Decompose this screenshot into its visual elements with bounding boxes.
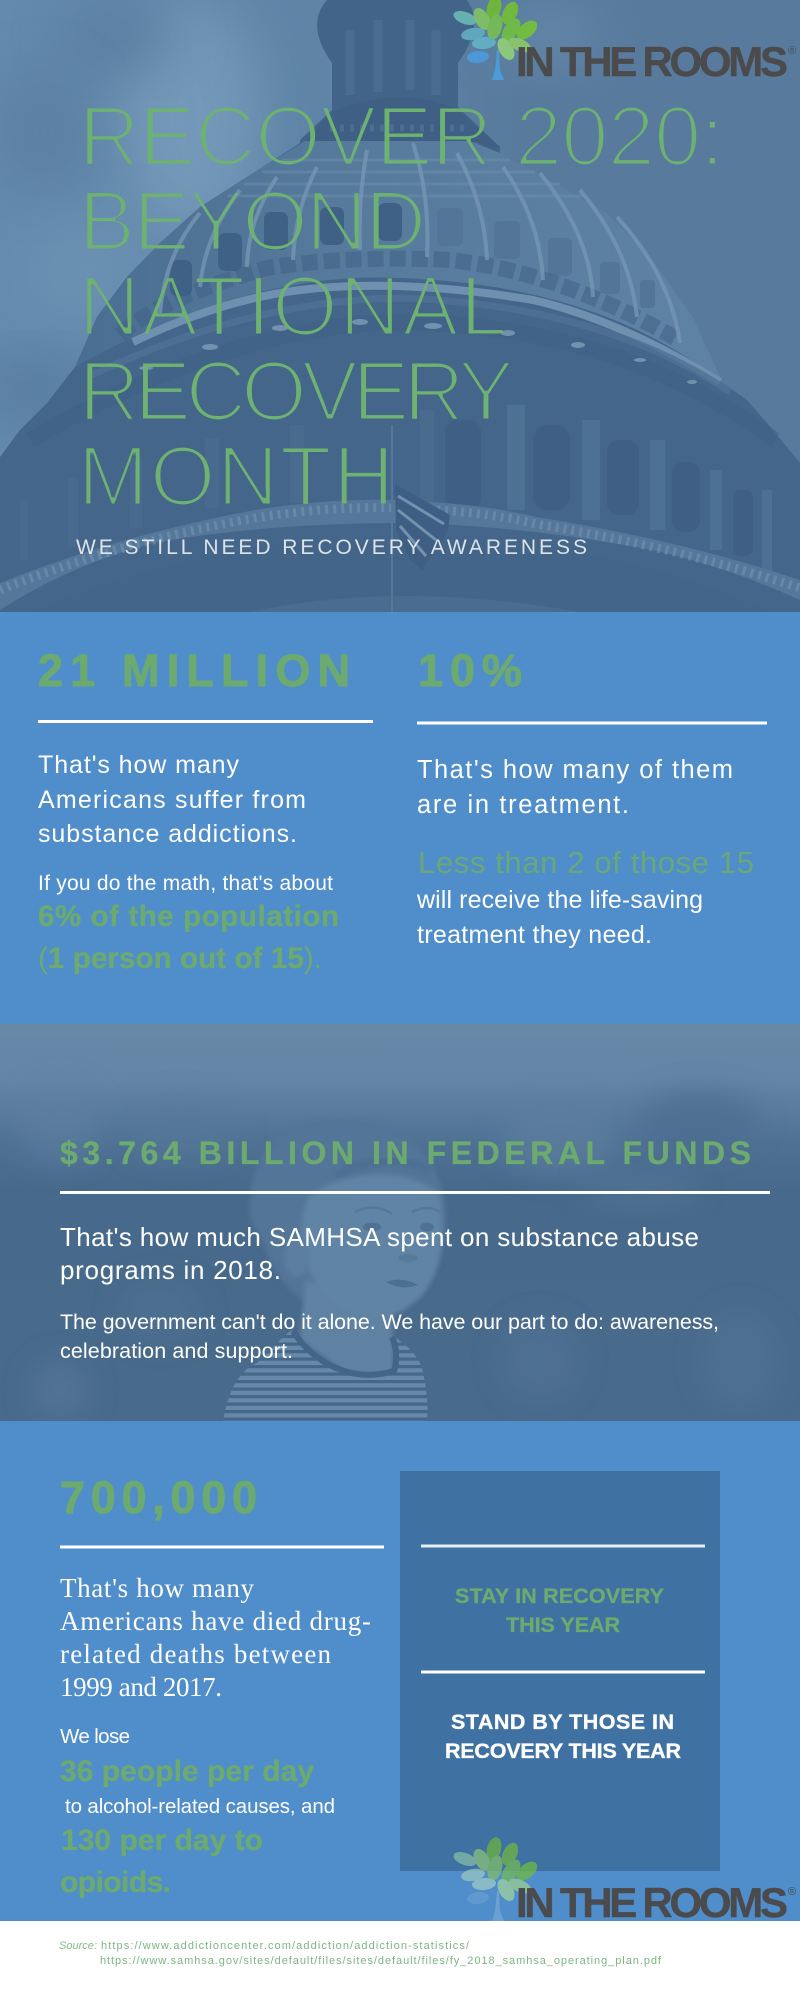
column: 700,000: 700,000 xyxy=(60,1472,257,1523)
balustrade xyxy=(0,500,800,610)
photo: capitol dome background xyxy=(0,0,800,612)
column: 21 million: That's how many xyxy=(38,751,240,779)
panel: source footer xyxy=(0,1921,800,2000)
column: 700,000: to alcohol-related causes, and xyxy=(65,1795,335,1818)
panel: federal funds with child photo xyxy=(0,1024,800,1421)
column: 10 percent: treatment they need. xyxy=(417,921,652,949)
column: 21 million: Americans suffer from xyxy=(38,786,306,814)
column: 21 million: substance addictions. xyxy=(38,820,297,848)
panel: source footer: https://www.addictioncenter.com/addiction/addiction-statistics/ xyxy=(101,1940,470,1952)
title: BEYOND xyxy=(79,174,426,268)
column: 700,000: 1999 and 2017. xyxy=(60,1672,222,1702)
column: 700,000: Americans have died drug- xyxy=(60,1606,371,1636)
column: 10 percent: will receive the life-saving xyxy=(416,886,703,914)
text block: The government can't do it alone. We have our part to do: awareness, xyxy=(60,1310,719,1334)
heading: $3.764 BILLION IN FEDERAL FUNDS xyxy=(60,1135,751,1171)
title: MONTH xyxy=(78,429,394,523)
column: 10 percent: Less than 2 of those 15 xyxy=(418,845,754,880)
column: 700,000: opioids. xyxy=(60,1866,171,1899)
column: 10 percent xyxy=(416,645,767,949)
cornice band xyxy=(133,286,720,382)
logo: In The Rooms (bottom): IN THE ROOMS xyxy=(516,1879,788,1926)
panel: addiction statistics xyxy=(0,612,800,1024)
column: 21 million: 6% of the population xyxy=(38,900,339,933)
flag xyxy=(391,425,393,612)
photo: child xyxy=(0,1024,800,1421)
column: 700,000 xyxy=(60,1472,384,1899)
neck xyxy=(300,1280,394,1375)
text block xyxy=(60,1222,719,1363)
column: 700,000: 130 per day to xyxy=(61,1824,263,1857)
logo: In The Rooms (bottom) xyxy=(452,1836,796,1926)
title: RECOVER 2020: xyxy=(79,89,724,183)
subtitle: WE STILL NEED RECOVERY AWARENESS xyxy=(76,536,587,559)
title: RECOVERY xyxy=(79,344,514,438)
panel: call to action box: STAY IN RECOVERY xyxy=(455,1584,664,1608)
panel: call to action box: THIS YEAR xyxy=(506,1613,620,1637)
panel: call to action box: STAND BY THOSE IN xyxy=(451,1710,674,1734)
facial features xyxy=(363,1222,381,1232)
column: 700,000: 36 people per day xyxy=(60,1755,314,1788)
logo: In The Rooms (top): ® xyxy=(788,45,796,57)
text block: celebration and support. xyxy=(60,1339,293,1363)
logo: In The Rooms (bottom): ® xyxy=(788,1886,796,1898)
column: 700,000: That's how many xyxy=(60,1573,254,1603)
text block: programs in 2018. xyxy=(60,1255,281,1285)
panel: source footer: Source: xyxy=(59,1940,97,1952)
column: 21 million: If you do the math, that's about xyxy=(38,872,333,895)
upper dome xyxy=(75,141,723,383)
panel: source footer: https://www.samhsa.gov/sites/default/files/sites/default/files/fy_2018_samhsa_operating_plan.pdf xyxy=(100,1955,662,1967)
column: 10 percent: are in treatment. xyxy=(417,791,629,819)
column: 21 million: (1 person out of 15). xyxy=(38,942,322,975)
column: 21 million xyxy=(38,645,373,975)
hair xyxy=(250,1164,444,1296)
face xyxy=(301,1174,442,1318)
column: 700,000: We lose xyxy=(60,1725,130,1748)
text block: That's how much SAMHSA spent on substance abuse xyxy=(60,1222,699,1252)
shirt xyxy=(223,1330,428,1421)
logo: In The Rooms (top) xyxy=(452,0,796,85)
panel: call to action box xyxy=(400,1471,720,1871)
logo: In The Rooms (top): IN THE ROOMS xyxy=(516,38,788,85)
panel: hero with capitol dome xyxy=(0,0,800,612)
title: NATIONAL xyxy=(79,259,507,353)
lantern xyxy=(300,0,500,170)
column: 10 percent: That's how many of them xyxy=(417,756,733,784)
column: 21 million: 21 MILLION xyxy=(38,645,350,696)
title xyxy=(78,89,724,523)
drum body xyxy=(0,143,800,612)
column: 10 percent: 10% xyxy=(418,645,522,696)
panel: call to action box: RECOVERY THIS YEAR xyxy=(445,1739,681,1763)
panel: deaths and call to action xyxy=(0,1421,800,1921)
column: 700,000: related deaths between xyxy=(60,1639,332,1669)
drum windows and pillars xyxy=(445,420,753,556)
